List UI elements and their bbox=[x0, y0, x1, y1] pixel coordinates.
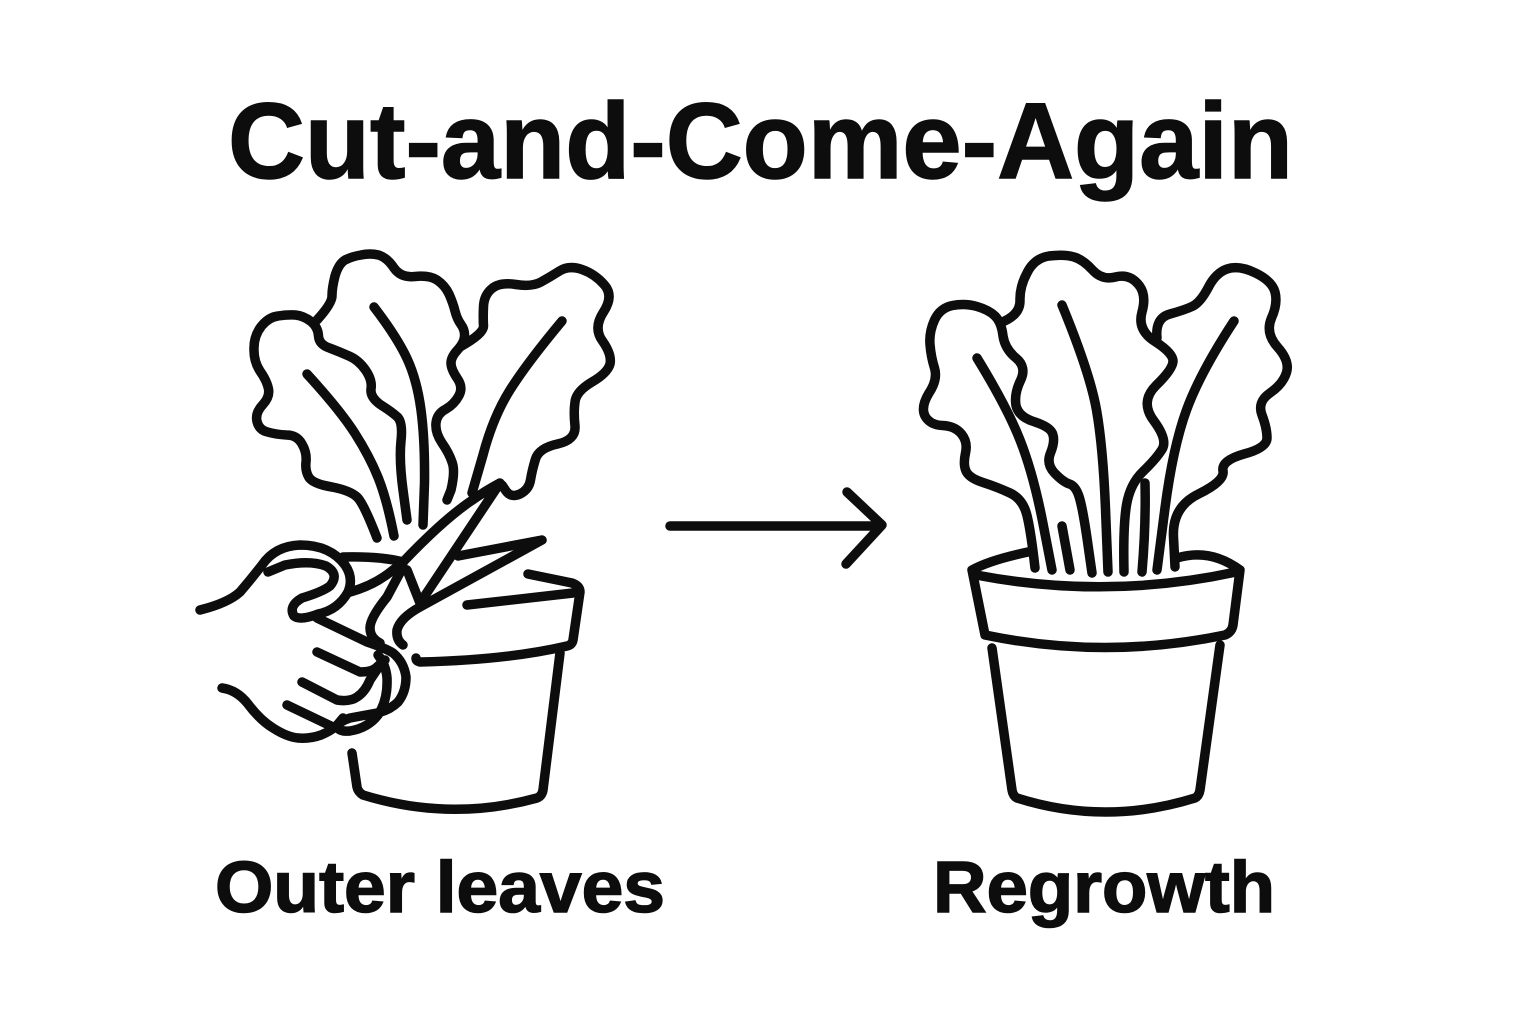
label: regrowth: Regrowth bbox=[933, 848, 1275, 928]
icon: right plant leaves bbox=[923, 255, 1287, 573]
panel: regrowth plant bbox=[923, 255, 1287, 812]
icon: hand bbox=[200, 545, 406, 738]
label: outer leaves: Outer leaves bbox=[215, 848, 665, 928]
icon: left plant leaves bbox=[254, 254, 610, 538]
icon: scissors bbox=[343, 483, 542, 645]
icon: left pot bbox=[352, 574, 580, 809]
arrow bbox=[670, 492, 882, 564]
icon: right pot bbox=[972, 552, 1240, 812]
panel: outer leaves being cut bbox=[200, 254, 610, 809]
title: Cut-and-Come-Again bbox=[228, 80, 1293, 201]
